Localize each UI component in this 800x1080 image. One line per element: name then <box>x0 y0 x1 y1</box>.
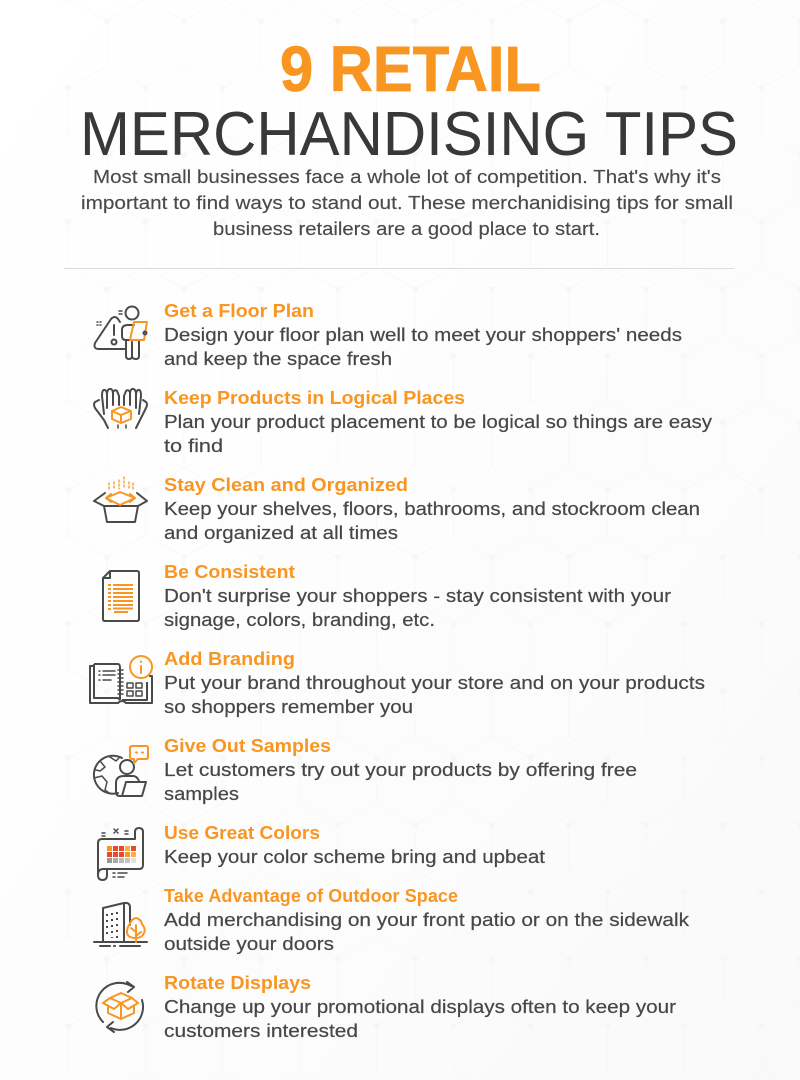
description: Keep your shelves, floors, bathrooms, and stockroom clean <box>164 499 700 519</box>
description <box>164 586 671 630</box>
heading: Keep Products in Logical Places <box>164 388 465 408</box>
description: Don't surprise your shoppers - stay consistent with your <box>164 586 671 606</box>
tip: use great colors <box>98 823 545 880</box>
description: Keep your color scheme bring and upbeat <box>164 847 545 867</box>
description: Design your floor plan well to meet your shoppers' needs <box>164 325 682 345</box>
tip: add branding <box>90 649 705 717</box>
tip: rotate displays <box>96 973 676 1041</box>
description: and organized at all times <box>164 523 398 543</box>
description: Plan your product placement to be logical so things are easy <box>164 412 712 432</box>
tip: stay clean and organized <box>94 475 700 543</box>
title <box>80 33 738 169</box>
description: customers interested <box>164 1021 358 1041</box>
description <box>164 997 676 1041</box>
description <box>164 910 690 954</box>
tip: be consistent <box>103 562 671 630</box>
description <box>164 760 637 804</box>
icon: person with floor plan <box>94 306 147 359</box>
icon: document <box>103 571 139 621</box>
description <box>164 499 700 543</box>
tip: give out samples <box>94 736 637 804</box>
description: so shoppers remember you <box>164 697 413 717</box>
description: Change up your promotional displays often to keep your <box>164 997 676 1017</box>
title: 9 RETAIL <box>280 33 541 105</box>
description <box>164 325 682 369</box>
icon: open book with info <box>90 656 152 703</box>
description: to find <box>164 436 223 456</box>
description: outside your doors <box>164 934 334 954</box>
icon: building and tree <box>94 903 147 946</box>
description: Add merchandising on your front patio or on the sidewalk <box>164 910 690 930</box>
title: MERCHANDISING TIPS <box>80 100 738 169</box>
description <box>164 673 705 717</box>
tip: take advantage of outdoor space <box>94 886 690 954</box>
icon: globe with person and laptop <box>94 746 148 796</box>
heading: Take Advantage of Outdoor Space <box>164 886 458 906</box>
intro text: business retailers are a good place to start. <box>213 218 600 239</box>
intro text: Most small businesses face a whole lot of competition. That's why it's <box>93 166 721 187</box>
tip: keep products in logical places <box>94 388 712 456</box>
tip: get a floor plan <box>94 301 682 369</box>
description <box>164 412 712 456</box>
heading: Stay Clean and Organized <box>164 475 408 495</box>
heading: Rotate Displays <box>164 973 311 993</box>
intro text: important to find ways to stand out. These merchanidising tips for small <box>81 192 733 213</box>
description: and keep the space fresh <box>164 349 392 369</box>
icon: rotating box <box>96 982 143 1032</box>
heading: Get a Floor Plan <box>164 301 314 321</box>
heading: Give Out Samples <box>164 736 331 756</box>
icon: color swatch scroll <box>98 828 143 880</box>
heading: Be Consistent <box>164 562 295 582</box>
description: samples <box>164 784 239 804</box>
intro text <box>81 166 733 239</box>
description: signage, colors, branding, etc. <box>164 610 435 630</box>
description: Let customers try out your products by offering free <box>164 760 637 780</box>
heading: Add Branding <box>164 649 295 669</box>
icon: open box <box>94 477 147 522</box>
description: Put your brand throughout your store and on your products <box>164 673 705 693</box>
heading: Use Great Colors <box>164 823 320 843</box>
icon: hands holding box <box>94 389 147 428</box>
